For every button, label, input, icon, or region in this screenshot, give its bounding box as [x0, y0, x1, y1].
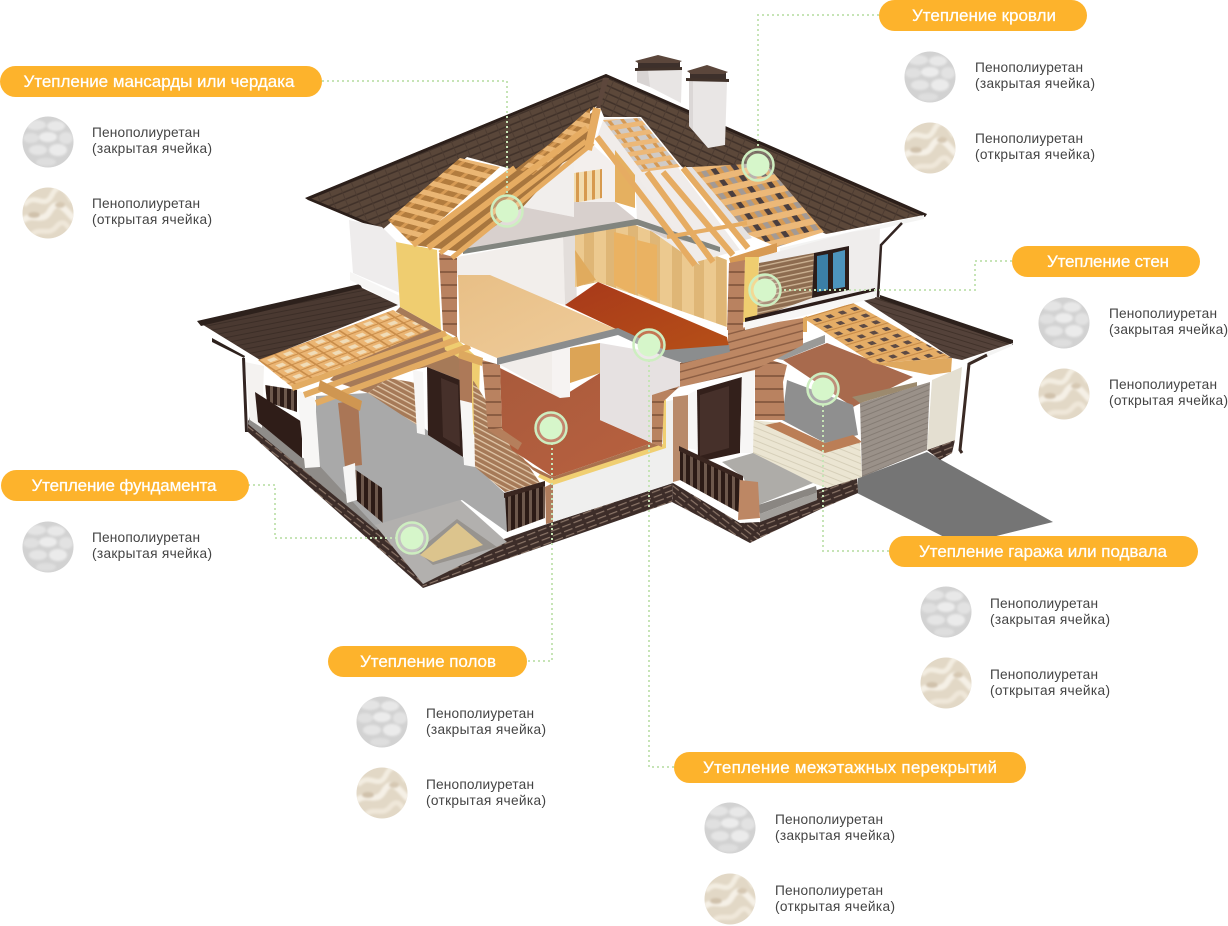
heading pill: Утепление фундамента	[32, 476, 217, 495]
open cell item	[356, 767, 546, 819]
panel: garage insulation	[889, 536, 1198, 709]
lower clapboard wall	[473, 380, 540, 492]
front lattice	[603, 118, 680, 172]
closed cell item: (закрытая ячейка)	[975, 76, 1095, 91]
open cell item	[904, 122, 1095, 174]
heading pill: Утепление мансарды или чердака	[24, 72, 295, 91]
wall filler above door	[330, 307, 460, 393]
open cell item: (открытая ячейка)	[1109, 393, 1228, 408]
closed cell item: (закрытая ячейка)	[92, 546, 212, 561]
garage cap	[765, 422, 862, 453]
pergola right	[803, 295, 1013, 453]
heading pill: Утепление кровли	[912, 6, 1056, 25]
heading pill: Утепление гаража или подвала	[919, 542, 1168, 561]
window	[812, 246, 849, 298]
closed cell item: (закрытая ячейка)	[775, 828, 895, 843]
panel: interfloor insulation	[674, 752, 1026, 925]
panel: floor insulation	[328, 646, 546, 819]
attic walls	[523, 145, 700, 265]
attic floor	[463, 202, 720, 252]
marker: roof	[742, 150, 774, 180]
panel: attic insulation	[0, 66, 322, 239]
closed cell item	[1038, 297, 1228, 349]
open cell item	[704, 873, 895, 925]
left wall clapboard	[368, 378, 417, 425]
heading pill	[879, 0, 1087, 31]
right lattice	[692, 163, 824, 247]
marker: walls	[750, 274, 780, 306]
closed cell item: (закрытая ячейка)	[92, 141, 212, 156]
open cell item: Пенополиуретан	[92, 196, 200, 211]
left white wall and gutter	[242, 358, 264, 432]
foundation brick band	[248, 420, 955, 588]
right porch steps	[722, 453, 817, 522]
garage beam	[852, 382, 917, 403]
left upper wall	[349, 220, 400, 293]
right gable beam	[729, 243, 777, 266]
heading pill	[889, 536, 1198, 567]
open cell item: Пенополиуретан	[426, 777, 534, 792]
garage ramp	[857, 452, 1053, 545]
open cell item: Пенополиуретан	[975, 131, 1083, 146]
right brick pillar	[673, 395, 688, 482]
open cell item: Пенополиуретан	[775, 883, 883, 898]
marker: floors	[536, 412, 566, 444]
heading pill	[1012, 246, 1200, 277]
brick column	[652, 386, 680, 447]
yellow insulation left	[396, 242, 441, 330]
right lattice insulation strip	[684, 167, 752, 240]
ground floor red floor	[500, 368, 652, 477]
open cell item	[22, 187, 212, 239]
downspout upper	[878, 223, 902, 297]
pergola left	[197, 284, 483, 411]
open cell item: (открытая ячейка)	[92, 212, 212, 227]
main roof	[305, 74, 927, 252]
light wood floor	[458, 275, 618, 358]
brick stack right	[755, 355, 787, 420]
right railing	[679, 446, 760, 520]
right clapboard wall	[757, 253, 814, 318]
closed cell item	[356, 696, 546, 748]
second floor walls	[457, 225, 727, 327]
front chimney	[686, 65, 729, 148]
white post and door	[413, 358, 475, 467]
closed cell item	[22, 521, 212, 573]
brick pier	[338, 400, 362, 503]
closed cell item: Пенополиуретан	[975, 60, 1083, 75]
interfloor slab edges	[497, 328, 730, 365]
ground floor back wall	[497, 343, 600, 398]
panel: wall insulation	[1012, 246, 1228, 420]
closed cell item: Пенополиуретан	[1109, 306, 1217, 321]
garage white brick	[927, 367, 962, 450]
heading pill: Утепление межэтажных перекрытий	[703, 758, 997, 777]
room brick step	[482, 360, 663, 482]
upper right wall	[759, 228, 880, 323]
open cell item: (открытая ячейка)	[990, 683, 1110, 698]
left lattice	[388, 158, 500, 245]
garage inner	[768, 335, 913, 443]
heading pill: Утепление полов	[360, 652, 496, 671]
concrete block with sand pit	[375, 500, 507, 584]
marker: attic	[492, 196, 522, 226]
open cell item: Пенополиуретан	[1109, 377, 1217, 392]
open cell item: Пенополиуретан	[990, 667, 1098, 682]
closed cell item	[904, 51, 1095, 103]
gable backing	[413, 108, 598, 252]
left ledge	[248, 416, 386, 530]
white pillar left	[297, 390, 320, 468]
heading pill	[674, 752, 1026, 783]
brick column left	[439, 253, 457, 337]
gable rafters	[413, 108, 748, 265]
front railing	[504, 481, 553, 532]
front white wall	[538, 400, 673, 522]
panel: roof insulation	[879, 0, 1095, 174]
ground floor partition	[552, 343, 680, 443]
closed cell item	[920, 586, 1110, 638]
closed cell item: Пенополиуретан	[990, 596, 1098, 611]
attic slab edge	[463, 219, 720, 254]
open cell item	[1038, 368, 1228, 420]
open cell item	[920, 657, 1110, 709]
open cell item: (открытая ячейка)	[775, 899, 895, 914]
rear chimney	[635, 55, 682, 103]
heading pill	[1, 470, 249, 501]
garage door	[860, 382, 930, 477]
left railings	[255, 385, 383, 523]
connector lines	[248, 15, 1012, 767]
white ledge	[745, 288, 875, 330]
brick band	[680, 318, 803, 387]
closed cell item: (закрытая ячейка)	[1109, 322, 1228, 337]
closed cell item	[704, 802, 895, 854]
heading pill	[328, 646, 527, 677]
closed cell item: (закрытая ячейка)	[426, 722, 546, 737]
open cell item: (открытая ячейка)	[426, 793, 546, 808]
porch floor	[316, 393, 507, 532]
eave band left	[350, 272, 400, 306]
marker: foundation	[396, 522, 428, 554]
open cell item: (открытая ячейка)	[975, 147, 1095, 162]
yellow insulation right	[743, 257, 759, 322]
closed cell item: Пенополиуретан	[92, 125, 200, 140]
marker: interfloor	[634, 330, 664, 360]
house illustration	[197, 55, 1053, 588]
left gable lattice	[520, 108, 590, 175]
closed cell item: (закрытая ячейка)	[990, 612, 1110, 627]
yellow strip by door	[441, 330, 480, 440]
closed cell item: Пенополиуретан	[775, 812, 883, 827]
brick pillar right	[727, 260, 745, 330]
dark red floor	[565, 282, 729, 352]
panel: foundation insulation	[1, 470, 249, 573]
closed cell item: Пенополиуретан	[426, 706, 534, 721]
cream brick wall	[752, 420, 862, 488]
heading pill: Утепление стен	[1047, 252, 1169, 271]
heading pill	[0, 66, 322, 97]
closed cell item	[22, 116, 212, 168]
right door	[687, 365, 755, 462]
marker: garage	[808, 374, 838, 404]
closed cell item: Пенополиуретан	[92, 530, 200, 545]
